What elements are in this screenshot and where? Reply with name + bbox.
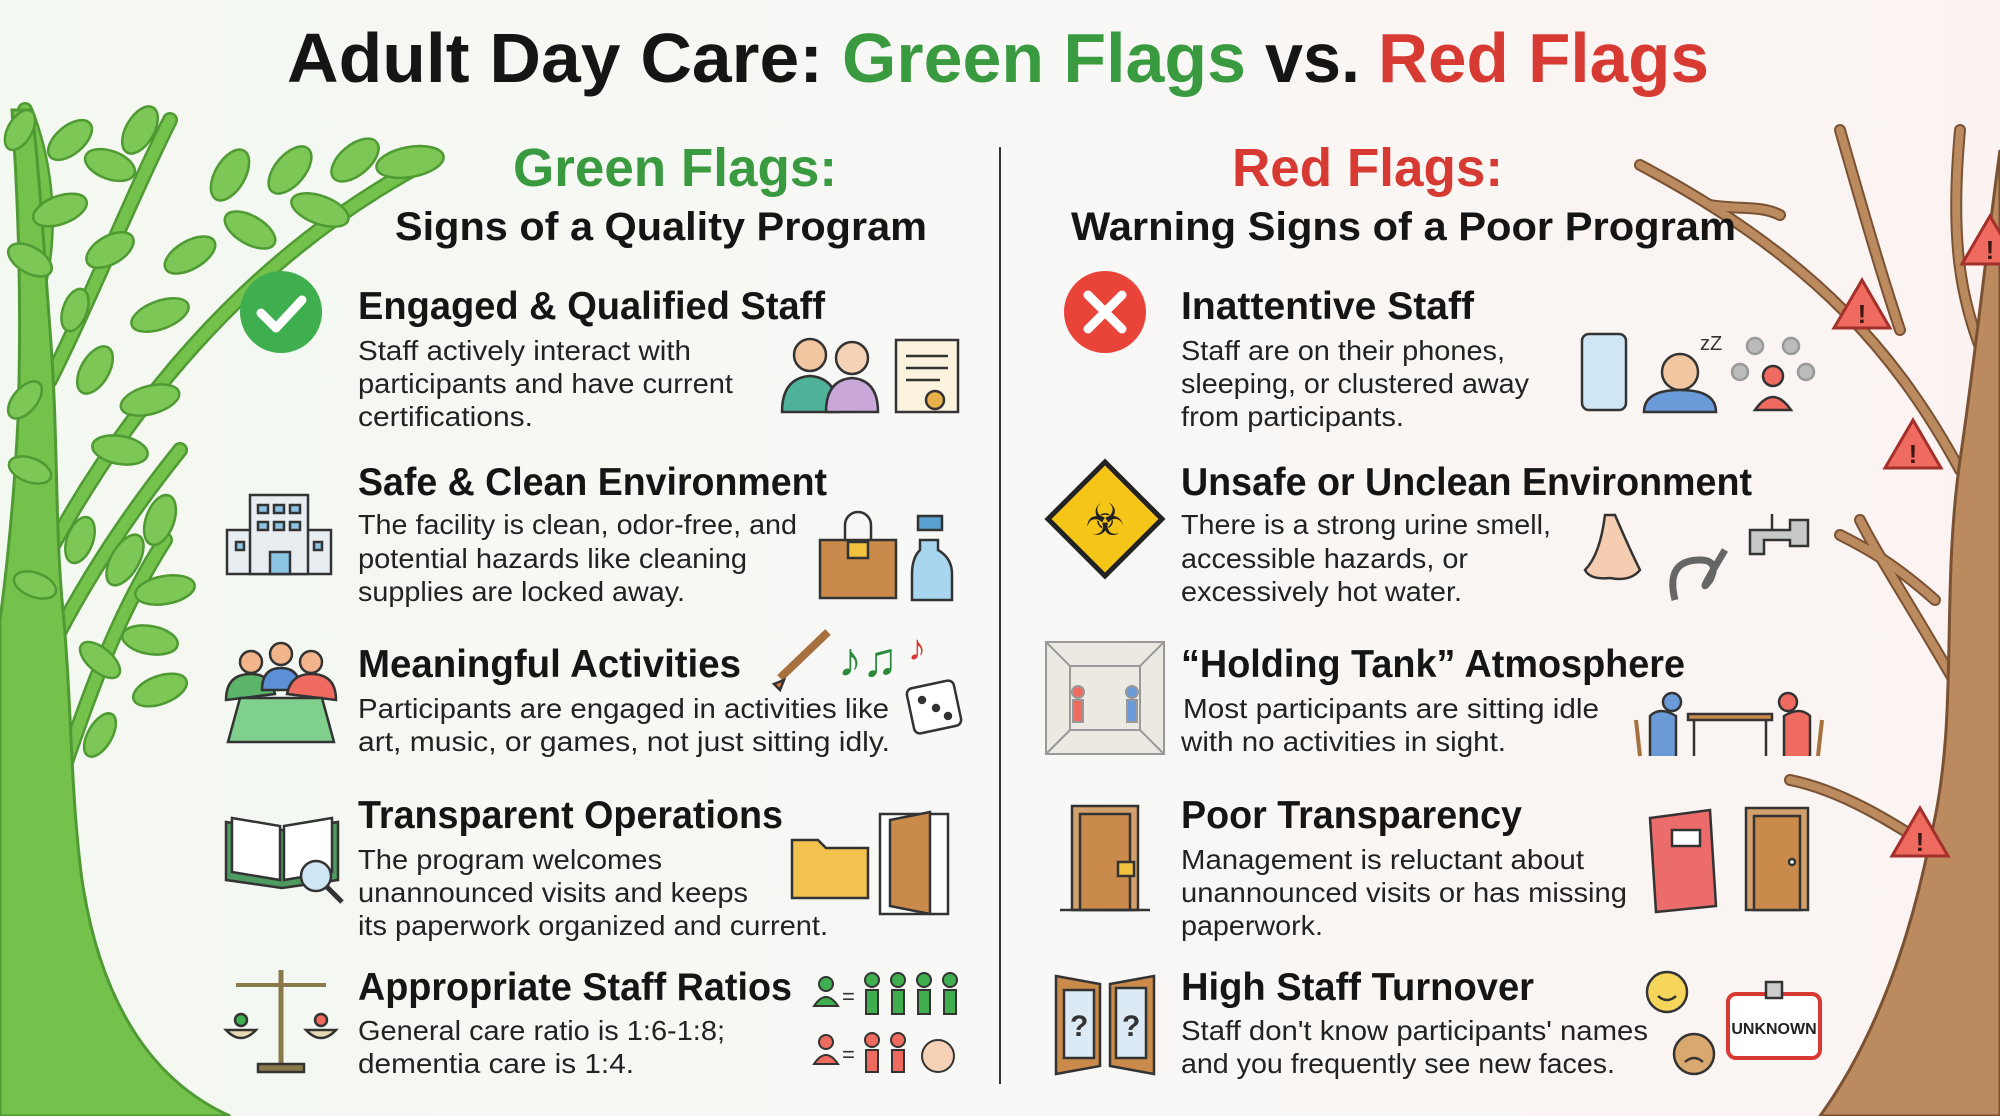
item: engaged staff: Staff actively interact with xyxy=(358,335,691,366)
icon: brush, notes, dice: ♪♫ xyxy=(838,634,898,687)
item: unsafe environment: Unsafe or Unclean Environment xyxy=(1181,461,1752,504)
item: inattentive staff xyxy=(1181,285,1529,432)
title: Adult Day Care: xyxy=(287,19,823,97)
item: meaningful activities: Meaningful Activities xyxy=(358,643,741,686)
item: engaged staff: certifications. xyxy=(358,401,533,432)
item: transparent operations xyxy=(358,794,828,941)
item: staff ratios: General care ratio is 1:6-1:8; xyxy=(358,1015,725,1046)
item: high turnover xyxy=(1181,966,1648,1079)
item: meaningful activities: Participants are engaged in activities like xyxy=(358,693,889,724)
heading: green xyxy=(395,138,927,249)
icon: folder & open door xyxy=(792,812,948,914)
icon: nose, hose, faucet xyxy=(1585,514,1808,600)
item: meaningful activities: art, music, or games, not just sitting idly. xyxy=(358,726,890,757)
item: transparent operations: its paperwork organized and current. xyxy=(358,910,828,941)
title: vs. xyxy=(1265,19,1360,97)
icon: open doors with question marks xyxy=(1056,976,1154,1074)
item: unsafe environment: accessible hazards, or xyxy=(1181,543,1468,574)
heading: green: Signs of a Quality Program xyxy=(395,205,927,249)
warning triangles: ! xyxy=(1916,827,1924,857)
icon: locked door xyxy=(1060,806,1150,910)
item: high turnover: High Staff Turnover xyxy=(1181,966,1534,1009)
right brown tree xyxy=(1640,130,2000,1116)
icon: book with magnifier xyxy=(226,818,342,902)
heading: red: Warning Signs of a Poor Program xyxy=(1071,205,1736,249)
warning triangles xyxy=(1834,216,2000,857)
item: inattentive staff: Staff are on their phones, xyxy=(1181,335,1505,366)
item: unsafe environment: There is a strong urine smell, xyxy=(1181,509,1551,540)
item: inattentive staff: from participants. xyxy=(1181,401,1404,432)
item: holding tank xyxy=(1180,643,1685,757)
item: holding tank: with no activities in sight. xyxy=(1180,726,1506,757)
icon: staff & certificate xyxy=(782,339,958,412)
heading: green: Green Flags: xyxy=(513,138,837,198)
item: unsafe environment: excessively hot water. xyxy=(1181,576,1462,607)
item: staff ratios: dementia care is 1:4. xyxy=(358,1048,634,1079)
icon: ratio people xyxy=(814,973,957,1072)
icon: open doors with question marks: ? xyxy=(1070,1010,1088,1043)
icon: open doors with question marks: ? xyxy=(1122,1010,1140,1043)
item: poor transparency: unannounced visits or has missing xyxy=(1181,877,1627,908)
item: poor transparency: paperwork. xyxy=(1181,910,1323,941)
icon: brush, notes, dice: ♪ xyxy=(908,627,926,668)
panel: red flags xyxy=(1046,271,1822,1079)
item: safe environment: supplies are locked away. xyxy=(358,576,685,607)
icon: faces & unknown badge xyxy=(1647,972,1820,1074)
item: transparent operations: The program welcomes xyxy=(358,844,662,875)
item: high turnover: Staff don't know participants' names xyxy=(1181,1015,1648,1046)
icon: phone, sleeper, group: zZ xyxy=(1700,333,1722,355)
heading: red xyxy=(1071,138,1736,249)
item: meaningful activities xyxy=(358,643,890,757)
heading: red: Red Flags: xyxy=(1232,138,1503,198)
icon: locked cabinet & spray xyxy=(820,512,952,600)
item: poor transparency: Poor Transparency xyxy=(1181,794,1522,837)
item: engaged staff xyxy=(358,285,826,432)
icon: binder & door xyxy=(1650,808,1808,912)
icon: ratio people: = xyxy=(842,984,855,1009)
warning triangles: ! xyxy=(1909,439,1917,469)
item: high turnover: and you frequently see new faces. xyxy=(1181,1048,1615,1079)
item: engaged staff: participants and have current xyxy=(358,368,733,399)
item: transparent operations: Transparent Operations xyxy=(358,794,783,837)
divider xyxy=(999,147,1001,1084)
item: poor transparency: Management is reluctant about xyxy=(1181,844,1584,875)
warning triangles: ! xyxy=(1858,299,1866,329)
item: holding tank: “Holding Tank” Atmosphere xyxy=(1181,643,1685,686)
warning triangles: ! xyxy=(1986,235,1994,265)
icon: brush, notes, dice xyxy=(774,627,962,734)
title: Red Flags xyxy=(1378,19,1709,97)
item: holding tank: Most participants are sitting idle xyxy=(1183,693,1599,724)
icon: biohazard xyxy=(1048,462,1162,576)
icon: faces & unknown badge: UNKNOWN xyxy=(1731,1021,1817,1038)
icon: empty room xyxy=(1046,642,1164,754)
item: engaged staff: Engaged & Qualified Staff xyxy=(358,285,826,328)
icon: biohazard: ☣ xyxy=(1085,496,1125,545)
item: inattentive staff: sleeping, or clustered away xyxy=(1181,368,1529,399)
item: staff ratios xyxy=(358,966,792,1079)
icon: idle people at table xyxy=(1636,693,1822,756)
item: safe environment: Safe & Clean Environment xyxy=(358,461,827,504)
icon: activity group xyxy=(226,643,336,742)
icon: building xyxy=(227,495,331,574)
title: Green Flags xyxy=(842,19,1246,97)
icon: x circle xyxy=(1064,271,1146,353)
item: inattentive staff: Inattentive Staff xyxy=(1181,285,1475,328)
icon: ratio people: = xyxy=(842,1042,855,1067)
item: safe environment xyxy=(358,461,827,607)
icon: scale xyxy=(226,970,336,1072)
icon: phone, sleeper, group xyxy=(1582,333,1814,412)
panel: green flags xyxy=(226,271,962,1079)
item: safe environment: potential hazards like cleaning xyxy=(358,543,747,574)
item: transparent operations: unannounced visits and keeps xyxy=(358,877,748,908)
item: safe environment: The facility is clean, odor-free, and xyxy=(358,509,797,540)
item: poor transparency xyxy=(1181,794,1627,941)
item: unsafe environment xyxy=(1181,461,1752,607)
left green tree xyxy=(0,100,446,1116)
title xyxy=(287,19,1709,97)
item: staff ratios: Appropriate Staff Ratios xyxy=(358,966,792,1009)
icon: check xyxy=(240,271,322,353)
